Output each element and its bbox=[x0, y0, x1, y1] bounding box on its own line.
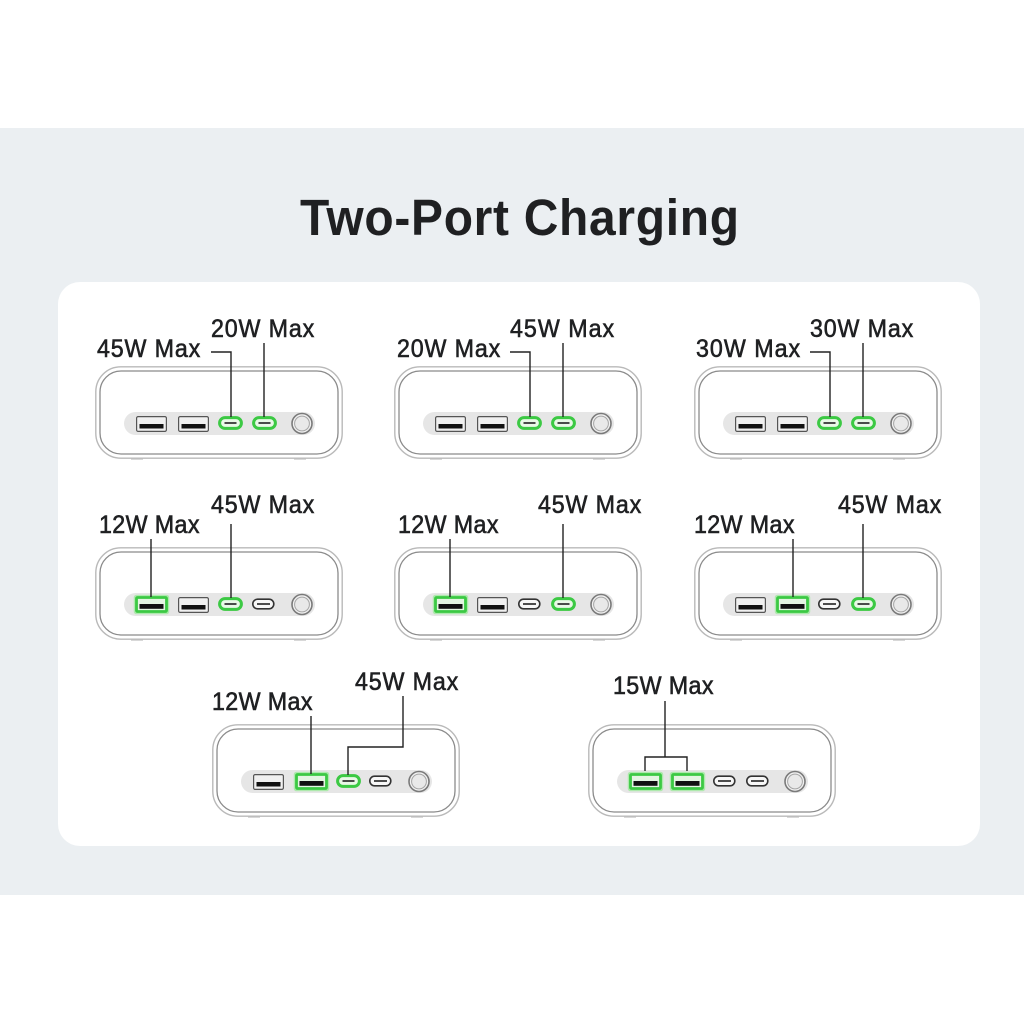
device: 12W + 45W, second A and first C bbox=[212, 668, 459, 818]
device: 12W + 45W, first A and first C: 12W Max bbox=[99, 511, 199, 539]
device: 12W + 45W, second A and second C: 12W Max bbox=[694, 511, 794, 539]
device: 20W + 45W: 45W Max bbox=[510, 315, 614, 343]
device: 12W + 45W, first A and first C: 45W Max bbox=[211, 491, 314, 519]
device: 12W + 45W, second A and second C: 45W Max bbox=[838, 491, 941, 519]
device: 20W + 45W: 20W Max bbox=[397, 335, 500, 363]
device: 15W shared by both A ports bbox=[589, 672, 835, 818]
device: 30W + 30W: 30W Max bbox=[810, 315, 913, 343]
background band bbox=[0, 128, 1024, 895]
device: 12W + 45W, first A and second C bbox=[395, 491, 641, 641]
device: 12W + 45W, second A and second C bbox=[694, 491, 941, 641]
device: 12W + 45W, first A and second C: 45W Max bbox=[538, 491, 641, 519]
title: Two-Port Charging bbox=[300, 190, 739, 246]
device: 15W shared by both A ports: 15W Max bbox=[613, 672, 713, 700]
device: 12W + 45W, second A and first C: 45W Max bbox=[355, 668, 458, 696]
device: 12W + 45W, second A and first C: 12W Max bbox=[212, 688, 312, 716]
device: 20W + 45W bbox=[395, 315, 641, 460]
device: 45W + 20W: 20W Max bbox=[211, 315, 314, 343]
device: 30W + 30W: 30W Max bbox=[696, 335, 800, 363]
device: 30W + 30W bbox=[695, 315, 941, 460]
panel: port combinations card bbox=[58, 282, 980, 846]
device: 45W + 20W bbox=[96, 315, 342, 460]
device: 12W + 45W, first A and first C bbox=[96, 491, 342, 641]
device: 45W + 20W: 45W Max bbox=[97, 335, 200, 363]
device: 12W + 45W, first A and second C: 12W Max bbox=[398, 511, 498, 539]
